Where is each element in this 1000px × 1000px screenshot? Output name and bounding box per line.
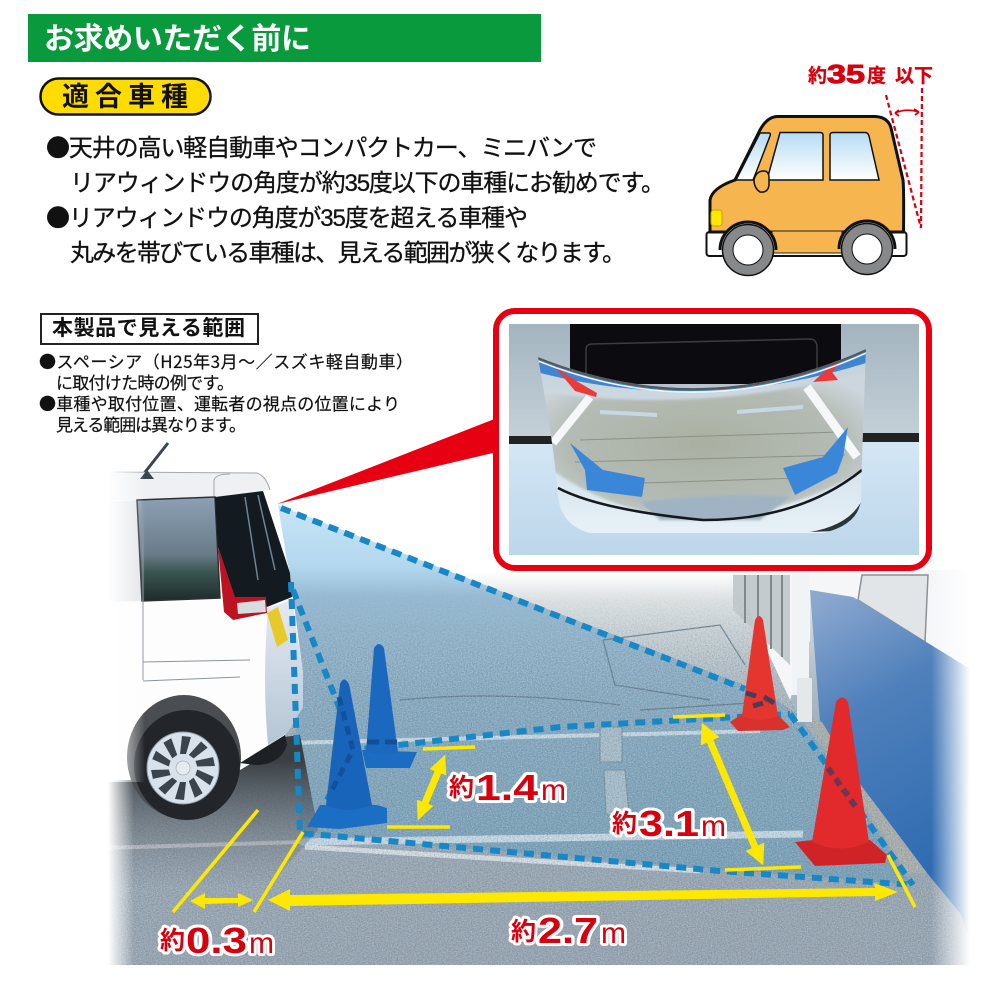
blue cone front bbox=[307, 680, 387, 829]
label: 0.3m: 約 bbox=[160, 927, 185, 955]
badge: applicable models bbox=[40, 78, 210, 114]
side window front bbox=[767, 132, 823, 180]
antenna bbox=[142, 443, 168, 476]
rear lower panel bbox=[265, 600, 303, 745]
text block: applicable models description: 丸みを帯びている車種は、見える範囲が狭くなります。 bbox=[70, 240, 626, 267]
rear window bbox=[215, 491, 292, 607]
car body bbox=[108, 472, 303, 780]
text block: notes bbox=[39, 348, 413, 436]
wheel arch bbox=[127, 695, 241, 819]
label: 3.1m: 約 bbox=[612, 810, 637, 838]
blue wall bbox=[810, 590, 968, 930]
car body lines bbox=[143, 502, 250, 681]
gravel strip bbox=[805, 716, 927, 873]
angle dashed lines bbox=[886, 88, 922, 228]
label: 3.1m bbox=[612, 803, 726, 844]
dashed range outline bbox=[281, 508, 913, 885]
tail light bbox=[218, 547, 267, 620]
text block: notes: 見える範囲は異なります。 bbox=[56, 411, 246, 436]
building upper wall bbox=[730, 570, 980, 700]
angle label: 以下 bbox=[895, 66, 933, 87]
roof bbox=[108, 472, 270, 500]
text block: applicable models description: ●リアウィンドウの角度が35度を超える車種や bbox=[46, 198, 528, 233]
label: 2.7m: m bbox=[601, 917, 626, 950]
antenna base bbox=[140, 470, 154, 479]
red pointer to mirror inset bbox=[277, 418, 497, 504]
red cone front bbox=[795, 698, 887, 866]
ground texture bbox=[115, 598, 956, 965]
title bar: お求めいただく前に bbox=[44, 23, 311, 56]
label: 1.4m: m bbox=[541, 774, 566, 807]
lower body strip bbox=[772, 231, 842, 253]
white car bbox=[100, 443, 303, 820]
text block: applicable models description: リアウィンドウの角度が約35度以下の車種にお勧めです。 bbox=[70, 170, 665, 197]
red cones in mirror bbox=[555, 356, 845, 397]
ground bbox=[100, 570, 980, 965]
windshield bbox=[736, 133, 770, 180]
parking lines bbox=[100, 731, 803, 871]
label: 3.1m: m bbox=[701, 810, 726, 843]
label: 1.4m: 1.4 bbox=[476, 767, 538, 808]
building window bbox=[858, 575, 928, 642]
text block: applicable models description bbox=[46, 128, 665, 267]
car shadow bbox=[110, 735, 318, 876]
label: 2.7m: 約 bbox=[511, 918, 536, 946]
photo scene: parking area bbox=[100, 505, 980, 965]
inset photo bbox=[509, 324, 919, 555]
inset frame bbox=[496, 311, 929, 568]
text block: notes: ●車種や取付位置、運転者の視点の位置により bbox=[39, 390, 400, 415]
arrow: 0.3m bbox=[190, 893, 253, 909]
bumper bbox=[706, 232, 906, 256]
angle label: 35 bbox=[827, 59, 865, 89]
title bar bbox=[28, 14, 541, 62]
pavement cracks bbox=[400, 625, 765, 710]
angle label: 度 bbox=[867, 65, 886, 87]
label: 1.4m bbox=[449, 767, 566, 808]
side mirror bbox=[754, 171, 769, 192]
license plate bbox=[267, 607, 288, 647]
side panel shade bbox=[108, 500, 141, 602]
car body bbox=[710, 116, 904, 232]
angle label: 約 bbox=[808, 65, 827, 87]
badge: applicable models: 適合車種 bbox=[62, 82, 188, 112]
label: 1.4m: 約 bbox=[449, 774, 474, 802]
concrete blocks bbox=[600, 727, 629, 815]
angle arrow bbox=[895, 109, 919, 116]
heading: visible range bbox=[41, 314, 258, 344]
mirror top band bbox=[538, 350, 866, 391]
wheels bbox=[720, 221, 895, 276]
drain pipe bbox=[792, 644, 812, 722]
heading: visible range: 本製品で見える範囲 bbox=[52, 317, 245, 340]
mirror dark line bbox=[558, 470, 862, 520]
mirror top edge bbox=[538, 350, 866, 389]
side window bbox=[137, 497, 220, 601]
arrow: 3.1m bbox=[701, 723, 764, 865]
label: 3.1m: 3.1 bbox=[639, 803, 699, 844]
mirror pale reflections bbox=[600, 407, 803, 415]
arrow: 2.7m bbox=[268, 883, 898, 911]
label: 2.7m bbox=[511, 910, 626, 951]
red cone back bbox=[730, 616, 790, 731]
angle label bbox=[808, 59, 933, 89]
blue cone back bbox=[362, 644, 417, 768]
bumper underside bbox=[240, 735, 287, 765]
white lines in mirror bbox=[553, 397, 590, 443]
text block: notes: ●スペーシア（H25年3月～／スズキ軽自動車） bbox=[39, 348, 413, 373]
label: 0.3m: m bbox=[249, 927, 274, 960]
text block: applicable models description: ●天井の高い軽自動車やコンパクトカー、ミニバンで bbox=[46, 128, 597, 163]
left fade bbox=[100, 470, 145, 782]
visible range tint bbox=[278, 505, 913, 885]
headlight bbox=[711, 210, 722, 226]
text block: notes: に取付けた時の例です。 bbox=[56, 369, 234, 394]
illustration: orange car with window angle bbox=[706, 59, 933, 276]
inset: mirror view bbox=[496, 311, 929, 568]
wheel cover bbox=[147, 732, 219, 804]
blue cones in mirror bbox=[570, 427, 848, 497]
tire bbox=[134, 710, 240, 820]
building door panels bbox=[733, 575, 790, 665]
label: 0.3m: 0.3 bbox=[186, 920, 247, 961]
label: 0.3m bbox=[160, 920, 274, 961]
yellow measurement guides bbox=[173, 715, 915, 912]
label: 2.7m: 2.7 bbox=[538, 910, 598, 951]
curved mirror bbox=[538, 349, 866, 533]
side window rear bbox=[830, 132, 879, 180]
arrow: 1.4m bbox=[417, 755, 446, 820]
